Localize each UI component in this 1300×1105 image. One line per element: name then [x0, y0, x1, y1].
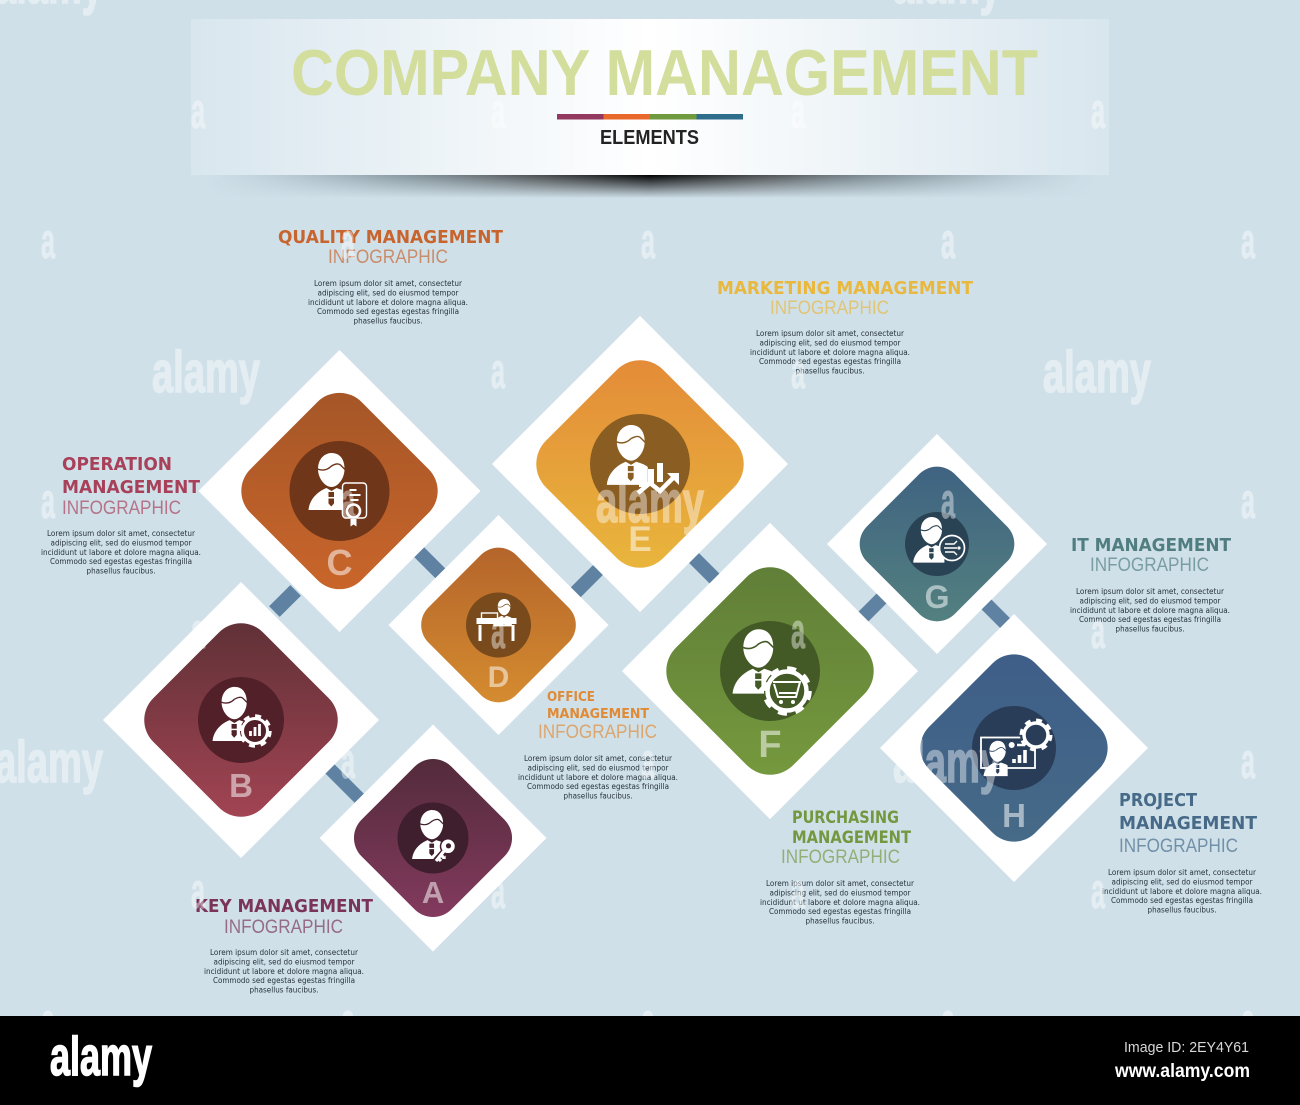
watermark overlay: a [1241, 213, 1256, 269]
text block: operation management: incididunt ut labore et dolore magna aliqua. [41, 548, 201, 557]
coloured diamond [131, 610, 351, 830]
text block: project management: MANAGEMENT [1119, 813, 1258, 834]
diamond F: purchasing management [622, 523, 918, 819]
text block: quality management: adipiscing elit, sed do eiusmod tempor [318, 288, 459, 297]
connectors between diamonds [269, 547, 1012, 804]
diamond E: marketing management [492, 316, 788, 612]
text block: quality management: QUALITY MANAGEMENT [278, 227, 504, 248]
watermark overlay: a [791, 863, 806, 919]
coloured diamond [411, 537, 586, 713]
text block: purchasing management: INFOGRAPHIC [781, 847, 900, 868]
text block: IT management: phasellus faucibus. [1116, 625, 1184, 634]
text block: operation management: Commodo sed egestas egestas fringilla [50, 557, 192, 566]
watermark overlay: a [491, 603, 506, 659]
watermark overlay: a [41, 993, 56, 1049]
white diamond [199, 350, 480, 632]
watermark overlay: a [1091, 603, 1106, 659]
text block: purchasing management [760, 808, 920, 926]
title: COMPANY MANAGEMENT [291, 36, 1038, 109]
watermark overlay: a [491, 343, 506, 399]
white diamond [388, 515, 609, 735]
icon: person at desk [466, 592, 531, 658]
letter F: F [758, 724, 782, 766]
letter D: D [488, 661, 509, 694]
text block: key management: Commodo sed egestas egestas fringilla [213, 976, 355, 985]
watermark overlay: a [1091, 863, 1106, 919]
text block: office management [518, 689, 678, 801]
text block: quality management: Commodo sed egestas egestas fringilla [317, 307, 459, 316]
text block: project management: PROJECT [1119, 790, 1198, 811]
text block: office management: OFFICE [547, 689, 595, 705]
watermark overlay: a [1091, 83, 1106, 139]
text block: operation management: OPERATION [62, 454, 172, 475]
text block: purchasing management: Commodo sed egestas egestas fringilla [769, 907, 911, 916]
text block: key management: adipiscing elit, sed do eiusmod tempor [214, 957, 355, 966]
text block: IT management [1070, 535, 1232, 634]
watermark overlay: a [791, 603, 806, 659]
white diamond [827, 434, 1047, 654]
text block: key management: phasellus faucibus. [250, 986, 318, 995]
watermark overlay: a [341, 993, 356, 1049]
text block: quality management: incididunt ut labore et dolore magna aliqua. [308, 298, 468, 307]
text block: office management: Commodo sed egestas egestas fringilla [527, 782, 669, 791]
text block: key management [195, 896, 374, 995]
watermark overlay: a [491, 83, 506, 139]
coloured diamond [343, 748, 523, 928]
text block: office management: incididunt ut labore et dolore magna aliqua. [518, 773, 678, 782]
text block: IT management: IT MANAGEMENT [1071, 535, 1232, 556]
text block: key management: incididunt ut labore et dolore magna aliqua. [204, 967, 364, 976]
white diamond [880, 614, 1148, 882]
watermark overlay: a [191, 863, 206, 919]
icon: person at screen with gear [972, 706, 1056, 790]
banner panel [191, 19, 1109, 175]
text block: quality management [278, 227, 504, 326]
text block: operation management: Lorem ipsum dolor sit amet, consectetur [47, 529, 196, 538]
text block: quality management: phasellus faucibus. [354, 317, 422, 326]
title banner [191, 19, 1109, 198]
text block: purchasing management: phasellus faucibus. [806, 917, 874, 926]
text block: project management: Lorem ipsum dolor sit amet, consectetur [1108, 868, 1257, 877]
text block: office management: adipiscing elit, sed do eiusmod tempor [528, 763, 669, 772]
text block: project management: adipiscing elit, sed do eiusmod tempor [1112, 877, 1253, 886]
icon: person with certificate [290, 441, 390, 541]
diamond H: project management [880, 614, 1148, 882]
image id: Image ID: 2EY4Y61 [1124, 1039, 1249, 1056]
text block: purchasing management: adipiscing elit, sed do eiusmod tempor [770, 888, 911, 897]
watermark overlay: a [341, 473, 356, 529]
letter C: C [326, 542, 352, 583]
diamond C: quality management [199, 350, 480, 632]
website: www.alamy.com [1114, 1061, 1250, 1082]
text block: key management: KEY MANAGEMENT [195, 896, 374, 917]
watermark overlay: a [41, 473, 56, 529]
white diamond [622, 523, 918, 819]
footer logo: alamy [50, 1025, 152, 1087]
text block: purchasing management: PURCHASING [792, 808, 899, 827]
text block: key management: INFOGRAPHIC [224, 917, 343, 938]
text block: marketing management: Lorem ipsum dolor sit amet, consectetur [756, 329, 905, 338]
text block: key management: Lorem ipsum dolor sit amet, consectetur [210, 948, 359, 957]
text block: operation management: adipiscing elit, sed do eiusmod tempor [50, 538, 192, 547]
white diamond [492, 316, 788, 612]
watermark overlay: a [791, 343, 806, 399]
footer bar [0, 1016, 1300, 1105]
text block: marketing management [717, 278, 974, 376]
diamond D: office management [388, 515, 609, 735]
text block: operation management: phasellus faucibus. [86, 567, 156, 576]
watermark overlay: a [341, 213, 356, 269]
letter G: G [925, 579, 949, 615]
text block: operation management [41, 454, 201, 576]
text block: IT management: adipiscing elit, sed do eiusmod tempor [1080, 596, 1221, 605]
letter A: A [422, 875, 444, 910]
coloured diamond [908, 642, 1120, 854]
text block: purchasing management: incididunt ut labore et dolore magna aliqua. [760, 898, 920, 907]
coloured diamond [523, 347, 757, 581]
text block: purchasing management: MANAGEMENT [792, 828, 912, 847]
text block: project management: incididunt ut labore et dolore magna aliqua. [1102, 887, 1262, 896]
text block: operation management: MANAGEMENT [62, 477, 201, 498]
watermark overlay: a [1241, 733, 1256, 789]
watermark overlay: a [1241, 993, 1256, 1049]
watermark overlay: a [191, 83, 206, 139]
white diamond [103, 582, 379, 858]
banner shadow [205, 175, 1095, 198]
text block: marketing management: phasellus faucibus. [796, 367, 864, 376]
text block: IT management: incididunt ut labore et dolore magna aliqua. [1070, 606, 1230, 615]
text block: marketing management: Commodo sed egestas egestas fringilla [759, 357, 901, 366]
watermark overlay: a [641, 993, 656, 1049]
text block: office management: phasellus faucibus. [564, 792, 632, 801]
watermark overlay: a [1241, 473, 1256, 529]
text block: project management [1102, 790, 1262, 915]
text block: marketing management: MARKETING MANAGEMENT [717, 278, 974, 299]
colour bar [557, 114, 743, 120]
subtitle: ELEMENTS [600, 127, 699, 149]
watermark overlay: a [941, 993, 956, 1049]
watermark overlay: alamy [1043, 340, 1151, 405]
icon: person with gear chart [198, 677, 284, 763]
text block: IT management: INFOGRAPHIC [1090, 555, 1209, 576]
letter H: H [1002, 797, 1026, 834]
watermark overlay: alamy [893, 730, 1001, 795]
text block: office management: Lorem ipsum dolor sit amet, consectetur [524, 754, 673, 763]
white diamond [320, 725, 546, 951]
text block: quality management: Lorem ipsum dolor sit amet, consectetur [314, 279, 463, 288]
icon: person with growth chart [590, 414, 690, 514]
coloured diamond [653, 554, 887, 788]
watermark overlay: a [641, 213, 656, 269]
watermark overlay: a [941, 473, 956, 529]
letter B: B [229, 767, 253, 804]
watermark overlay: a [491, 863, 506, 919]
text block: office management: MANAGEMENT [547, 706, 650, 722]
diamond B: operation management [103, 582, 379, 858]
text block: operation management: INFOGRAPHIC [62, 498, 181, 519]
coloured diamond [849, 456, 1025, 632]
watermark overlay: alamy [596, 470, 704, 535]
watermark overlay: a [641, 733, 656, 789]
text block: office management: INFOGRAPHIC [538, 722, 657, 743]
watermark overlay: a [41, 213, 56, 269]
text block: project management: INFOGRAPHIC [1119, 836, 1238, 857]
diamond G: IT management [827, 434, 1047, 654]
text block: marketing management: incididunt ut labore et dolore magna aliqua. [750, 348, 910, 357]
icon: person with key [398, 802, 468, 874]
watermark overlay: a [191, 603, 206, 659]
icon: person with cart gear [720, 621, 820, 721]
text block: marketing management: adipiscing elit, sed do eiusmod tempor [760, 338, 901, 347]
text block: purchasing management: Lorem ipsum dolor sit amet, consectetur [766, 879, 915, 888]
text block: project management: phasellus faucibus. [1148, 906, 1216, 915]
watermark overlay: alamy [152, 340, 260, 405]
text block: quality management: INFOGRAPHIC [328, 247, 448, 268]
coloured diamond [228, 380, 451, 602]
text block: IT management: Commodo sed egestas egestas fringilla [1079, 615, 1221, 624]
icon: person with digital circle [905, 512, 969, 576]
watermark overlay: a [791, 83, 806, 139]
text block: marketing management: INFOGRAPHIC [770, 298, 889, 319]
text block: project management: Commodo sed egestas egestas fringilla [1111, 896, 1253, 905]
letter E: E [628, 520, 652, 559]
watermark overlay: a [941, 213, 956, 269]
diamond A: key management [320, 725, 546, 951]
watermark overlay: a [341, 733, 356, 789]
text block: IT management: Lorem ipsum dolor sit amet, consectetur [1076, 587, 1225, 596]
